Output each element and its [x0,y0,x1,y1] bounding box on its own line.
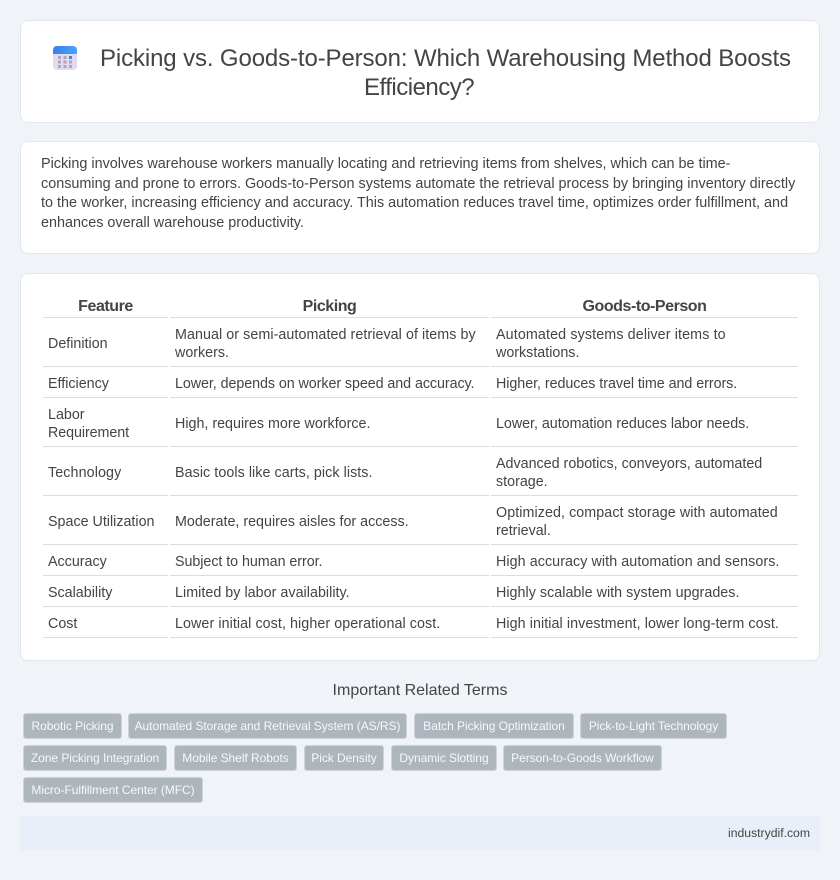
row: Labor Requirement [48,407,749,441]
tag: Batch Picking Optimization [423,719,565,733]
tag: Automated Storage and Retrieval System (AS/RS) [135,719,400,733]
tag [503,745,662,771]
row: Definition: Definition [48,336,108,352]
tag: Mobile Shelf Robots [182,751,289,765]
table header: Feature [78,298,133,315]
tag: Pick Density [311,751,377,765]
text block: introduction: to the worker, increasing efficiency and accuracy. This automation reduces travel time, optimizes order fulfillment, and [41,195,788,211]
row: Definition [48,327,726,361]
row: Space Utilization: Moderate, requires aisles for access. [175,514,409,530]
tag [23,713,122,739]
heading: title: Efficiency? [364,74,474,101]
tag list: related terms [23,713,727,803]
row: Definition: workers. [175,345,229,361]
footer text: industrydif.com [728,826,810,840]
panel: introduction text [20,141,820,254]
tag [128,713,407,739]
table header: Picking [303,298,356,315]
text block: introduction [41,156,796,231]
row: Efficiency [48,376,737,392]
table header: Goods-to-Person [583,298,706,315]
row: Technology [48,456,762,490]
tag [414,713,574,739]
panel: title card [20,20,820,123]
tag: Zone Picking Integration [31,751,159,765]
row: Cost [48,616,779,632]
tag: Person-to-Goods Workflow [511,751,654,765]
row: Scalability: Limited by labor availability. [175,585,350,601]
heading: Important Related Terms: Important Related Terms [333,682,507,699]
tag [580,713,727,739]
panel: comparison table [20,273,820,661]
row: Accuracy: High accuracy with automation and sensors. [496,554,779,570]
row: Accuracy: Subject to human error. [175,554,322,570]
row: Cost: Cost [48,616,77,632]
row: Definition: Manual or semi-automated retrieval of items by [175,327,476,343]
heading: title [100,45,791,101]
row: Technology: Advanced robotics, conveyors, automated [496,456,762,472]
tag [174,745,297,771]
row: Technology: storage. [496,474,548,490]
row: Labor Requirement: Lower, automation reduces labor needs. [496,416,749,432]
tag: Micro-Fulfillment Center (MFC) [31,783,195,797]
tag [23,777,203,803]
row: Scalability: Scalability [48,585,112,601]
row: Cost: High initial investment, lower long-term cost. [496,616,779,632]
heading: title: Picking vs. Goods-to-Person: Which Warehousing Method Boosts [100,45,791,72]
table header [78,298,706,315]
text block: introduction: consuming and prone to errors. Goods-to-Person systems automate the retrieval process by bringing inventory directly [41,176,795,192]
row: Scalability: Highly scalable with system upgrades. [496,585,739,601]
row: Labor Requirement: Labor [48,407,85,423]
tag [304,745,384,771]
row: Definition: workstations. [496,345,579,361]
row: Efficiency: Efficiency [48,376,109,392]
row: Space Utilization: retrieval. [496,523,551,539]
row: Accuracy [48,554,779,570]
row: Space Utilization: Optimized, compact storage with automated [496,505,778,521]
tag [391,745,497,771]
text block: introduction: Picking involves warehouse workers manually locating and retrieving items from shelves, which can be time- [41,156,730,172]
row: Technology: Technology [48,465,121,481]
row: Labor Requirement: Requirement [48,425,129,441]
tag: Dynamic Slotting [399,751,489,765]
tag: Pick-to-Light Technology [589,719,718,733]
row: Efficiency: Lower, depends on worker speed and accuracy. [175,376,474,392]
row: Space Utilization: Space Utilization [48,514,154,530]
row: Cost: Lower initial cost, higher operational cost. [175,616,440,632]
row: Efficiency: Higher, reduces travel time and errors. [496,376,737,392]
row: Technology: Basic tools like carts, pick lists. [175,465,373,481]
text block: introduction: enhances overall warehouse productivity. [41,215,304,231]
row: Accuracy: Accuracy [48,554,107,570]
row: Definition: Automated systems deliver items to [496,327,726,343]
row: Space Utilization [48,505,778,539]
tag [23,745,167,771]
row: Scalability [48,585,739,601]
footer bar [20,816,820,850]
row: Labor Requirement: High, requires more workforce. [175,416,370,432]
tag: Robotic Picking [32,719,113,733]
icon: calendar grid [53,46,77,70]
